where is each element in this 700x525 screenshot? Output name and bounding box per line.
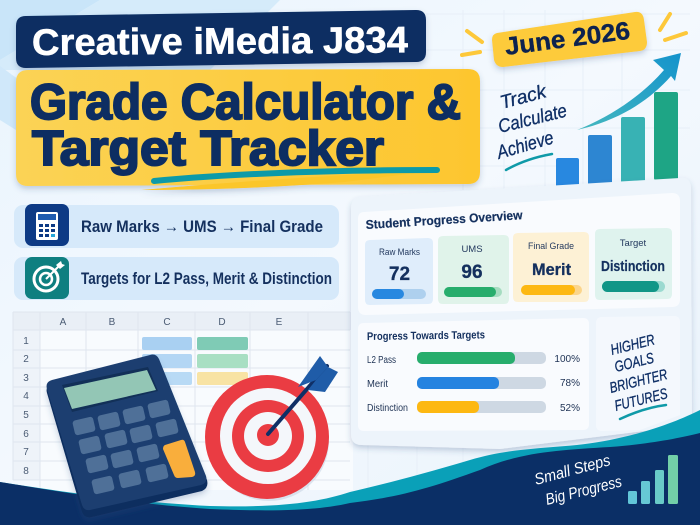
- spreadsheet: 5: [23, 410, 29, 421]
- spreadsheet: D: [218, 317, 226, 328]
- stat card: ums: UMS: [461, 244, 483, 255]
- footer slogan: Big Progress: [544, 474, 624, 509]
- progress row: L2 Pass: L2 Pass: [367, 355, 396, 366]
- target: [205, 356, 338, 501]
- spreadsheet: 4: [23, 391, 29, 402]
- stat card: raw marks: Raw Marks: [379, 247, 420, 258]
- spreadsheet: [13, 312, 353, 490]
- progress row: Merit: 78%: [560, 378, 580, 389]
- panel: motivational note: BRIGHTER: [608, 366, 669, 397]
- header pill: Creative iMedia J834: [16, 10, 426, 68]
- spreadsheet: 1: [23, 336, 29, 347]
- arrow: growth: [577, 53, 681, 130]
- stat card: target: Distinction: [601, 258, 665, 275]
- handwritten note: track calculate achieve: Calculate: [496, 101, 569, 138]
- progress row: Merit: [367, 377, 580, 390]
- panel: progress towards targets: [358, 318, 589, 431]
- dashboard panel: [351, 178, 692, 449]
- wave footer: [0, 482, 350, 525]
- feature row: raw marks to final grade: Raw Marks → UMS → Final Grade: [81, 217, 323, 236]
- progress row: Distinction: Distinction: [367, 403, 408, 414]
- calculator: [47, 354, 207, 517]
- spreadsheet: C: [163, 317, 171, 328]
- handwritten note: track calculate achieve: Track: [498, 81, 550, 114]
- background grid: [368, 10, 690, 490]
- spreadsheet: B: [109, 317, 116, 328]
- footer slogan: [533, 452, 624, 509]
- stat card: target: [595, 228, 672, 300]
- spreadsheet: E: [276, 317, 283, 328]
- icon: target: [25, 257, 69, 299]
- stat card: raw marks: [365, 238, 433, 305]
- panel: student progress overview: [358, 193, 680, 315]
- date badge: [492, 12, 647, 67]
- spreadsheet: 2: [23, 354, 29, 365]
- progress row: L2 Pass: 100%: [554, 354, 580, 365]
- stat card: ums: [438, 235, 509, 304]
- feature row: raw marks to final grade: [14, 204, 339, 248]
- bar chart: growth: [556, 92, 678, 188]
- sparkle accents: [462, 14, 686, 55]
- header pill: Creative iMedia J834: Creative iMedia J834: [32, 19, 408, 63]
- icon: calculator: [25, 204, 69, 246]
- footer bar icon: [628, 455, 678, 504]
- spreadsheet: A: [60, 317, 67, 328]
- spreadsheet: 7: [23, 447, 29, 458]
- heading: progress towards targets: Progress Towards Targets: [367, 329, 485, 343]
- heading: student progress overview: Student Progress Overview: [365, 208, 523, 232]
- progress row: L2 Pass: [367, 352, 580, 366]
- spreadsheet: 6: [23, 429, 29, 440]
- title panel: Target Tracker: [32, 122, 384, 176]
- title panel: Grade Calculator &: [30, 74, 461, 130]
- arrow: dart: [268, 356, 338, 434]
- date badge: June 2026: [503, 17, 632, 61]
- stat card: ums: 96: [461, 262, 483, 283]
- stat card: target: Target: [620, 238, 647, 249]
- feature row: targets: [14, 257, 339, 300]
- progress row: Distinction: [367, 401, 580, 414]
- panel: motivational note: HIGHER: [609, 331, 657, 359]
- spreadsheet: 8: [23, 466, 29, 477]
- stat card: raw marks: 72: [389, 264, 410, 285]
- progress row: Merit: Merit: [367, 379, 388, 390]
- stat card: final grade: Final Grade: [528, 241, 574, 252]
- stat card: final grade: [513, 232, 589, 302]
- handwritten note: track calculate achieve: Achieve: [494, 128, 556, 164]
- feature row: targets: Targets for L2 Pass, Merit & Distinction: [81, 269, 332, 288]
- handwritten note: track calculate achieve: [494, 81, 569, 170]
- panel: motivational note: FUTURES: [613, 385, 669, 415]
- wave overlay: [350, 410, 700, 525]
- stat card: final grade: Merit: [532, 261, 571, 279]
- progress row: Distinction: 52%: [560, 403, 580, 414]
- panel: motivational note: GOALS: [613, 350, 656, 376]
- footer slogan: Small Steps: [533, 452, 612, 489]
- panel: motivational note: [596, 316, 680, 431]
- title panel: [16, 69, 480, 190]
- spreadsheet: 3: [23, 373, 29, 384]
